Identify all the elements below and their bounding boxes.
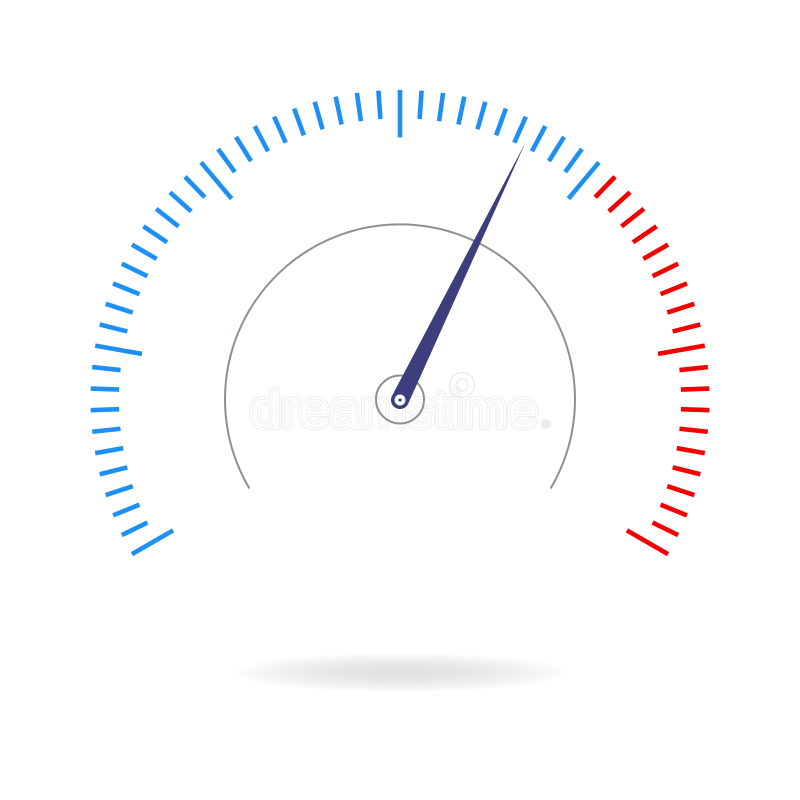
watermark: dreamstime xyxy=(250,381,538,439)
red scale ticks xyxy=(595,177,709,554)
hub ring xyxy=(376,376,424,424)
watermark: dreamstime xyxy=(250,381,538,439)
ground shadow xyxy=(228,652,572,692)
inner arc xyxy=(225,224,575,488)
watermark: dreamstime xyxy=(250,381,538,439)
blue scale ticks xyxy=(91,90,599,554)
needle xyxy=(388,139,533,412)
